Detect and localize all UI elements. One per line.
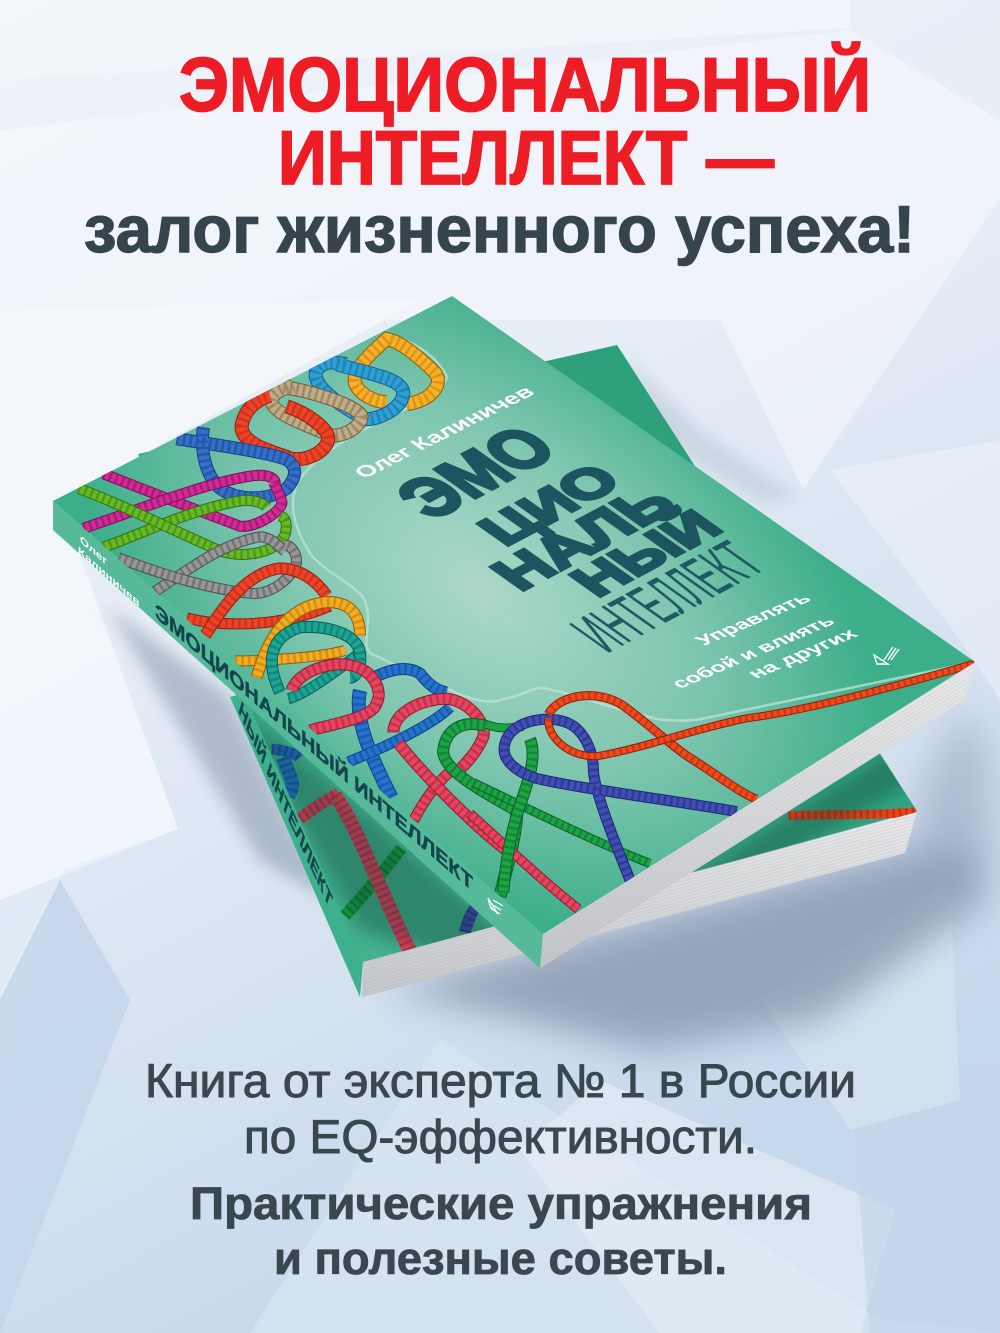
lower book ropes	[272, 749, 917, 951]
spine title: ЭМОЦИОНАЛЬНЫЙ ИНТЕЛЛЕКТ	[155, 598, 473, 897]
rope: blue knot	[348, 669, 450, 798]
cover author: Олег Калиничев	[349, 383, 540, 482]
headline: ИНТЕЛЛЕКТ —	[278, 116, 774, 201]
rope: crimson knot	[393, 699, 507, 850]
rope: yellow loop	[355, 339, 438, 404]
headline: залог жизненного успеха!	[84, 192, 915, 266]
rope: crimson lower	[470, 814, 578, 909]
rope: crimson	[292, 664, 379, 730]
practical exercises statement	[190, 1178, 812, 1284]
expert statement: по EQ-эффективности.	[244, 1110, 757, 1163]
spine author	[78, 534, 140, 611]
cover title	[380, 415, 734, 605]
cover title: НЫЙ	[557, 501, 734, 605]
publisher logo on cover	[874, 647, 899, 664]
ropes on upper cover	[78, 339, 975, 909]
lower book cover	[138, 345, 917, 962]
practical exercises statement: Практические упражнения	[190, 1178, 812, 1229]
upper book cover	[53, 296, 975, 934]
cover title: НАЛЬ	[478, 477, 690, 600]
headline	[84, 42, 915, 266]
expert statement: Книга от эксперта № 1 в России	[145, 1054, 856, 1107]
headline: ЭМОЦИОНАЛЬНЫЙ	[179, 42, 871, 128]
practical exercises statement: и полезные советы.	[274, 1233, 727, 1284]
cover tagline: Управлять	[691, 591, 817, 649]
upper book	[53, 296, 975, 990]
shadow on lower book	[251, 708, 905, 951]
lower book	[138, 345, 917, 997]
rope: violet loop	[504, 719, 737, 880]
upper book spine	[53, 501, 543, 968]
rope: green lower	[473, 725, 650, 893]
head silhouette on cover	[293, 336, 975, 721]
cover title: ЭМО	[380, 415, 574, 530]
rope: lime green	[78, 488, 286, 554]
lower book page block	[362, 811, 917, 997]
book shadows	[107, 350, 990, 1050]
rope: tan loop	[272, 385, 362, 436]
lower book spine	[230, 690, 363, 997]
spine author: Олег	[80, 534, 108, 569]
rope: royal blue loop	[177, 427, 295, 498]
expert statement	[145, 1054, 856, 1163]
cover title: ЦИО	[466, 456, 634, 554]
rope: red-orange loop	[242, 396, 328, 459]
rope: red	[187, 568, 330, 636]
rope: grey	[118, 537, 297, 594]
rope: amber	[235, 602, 360, 678]
spine author: Калиничев	[78, 545, 140, 611]
rope: magenta	[83, 474, 282, 528]
cover tagline: на других	[743, 626, 864, 682]
rope: red long	[548, 664, 975, 799]
cover tagline	[667, 591, 864, 692]
publisher logo on spine	[488, 898, 503, 914]
cover tagline: собой и влиять	[667, 613, 840, 692]
rope: teal	[272, 627, 360, 699]
rope: sky blue loop	[316, 362, 403, 419]
lower book spine title: НЫЙ ИНТЕЛЛЕКТ	[237, 697, 334, 913]
rope: green knot	[443, 724, 520, 897]
upper book page block	[540, 662, 975, 968]
cover subtitle intellect: ИНТЕЛЛЕКТ	[555, 531, 781, 663]
